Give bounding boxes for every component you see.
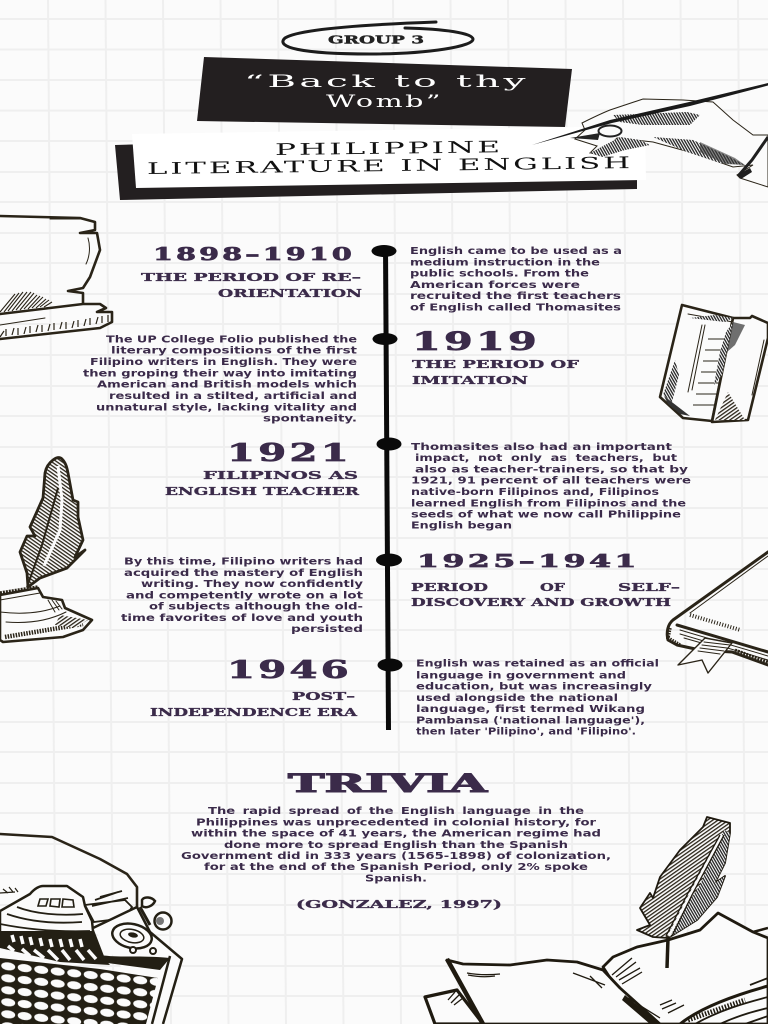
entry 1919 heading: 1919 (412, 327, 540, 356)
entry 1919 text: Filipino writers in English. They were (90, 357, 357, 368)
trivia heading: TRIVIA (288, 769, 488, 798)
icon: hand holding pen (532, 83, 768, 187)
entry 1921 heading: 1921 (227, 438, 352, 467)
subtitle banner (115, 126, 646, 200)
entry 1925–1941 heading: DISCOVERY AND GROWTH (411, 596, 671, 609)
trivia text: for at the end of the Spanish Period, only 2% spoke (204, 862, 588, 873)
entry 1946 heading (150, 655, 358, 719)
icon: quill over open book (425, 817, 768, 1024)
entry 1919 heading (412, 327, 579, 387)
entry 1919 text: literary compositions of the first (111, 346, 358, 356)
icon: scroll (0, 216, 112, 339)
entry 1925–1941 heading: OF (540, 581, 565, 594)
entry 1919 text: then groping their way into imitating (83, 368, 357, 380)
entry 1919 heading: THE PERIOD OF (412, 358, 579, 371)
subtitle banner: PHILIPPINE (275, 137, 503, 159)
group label with hand-drawn ellipse (283, 22, 473, 54)
trivia text: Spanish. (365, 874, 427, 884)
entry 1946 text: language, first termed Wikang (416, 704, 645, 715)
group label with hand-drawn ellipse: GROUP 3 (328, 34, 424, 46)
entry 1898–1910 heading: THE PERIOD OF RE– (141, 271, 361, 284)
entry 1919 text: The UP College Folio published the (106, 334, 357, 346)
entry 1925–1941 heading: SELF– (618, 581, 680, 594)
entry 1946 text: language in government and (416, 670, 626, 682)
icon: two books (660, 305, 768, 422)
trivia text: The rapid spread of the English language in the (208, 806, 584, 817)
entry 1898–1910 heading: ORIENTATION (218, 287, 362, 300)
entry 1898–1910 text: medium instruction in the (410, 258, 600, 268)
entry 1919 text: American and British models which (97, 380, 357, 390)
entry 1921 text: English began (411, 520, 512, 532)
timeline (372, 245, 402, 730)
entry 1925–1941 text: and competently wrote on a lot (126, 590, 364, 602)
entry 1921 text: also as teacher-trainers, so that by (415, 464, 688, 476)
entry 1925–1941 text: writing. They now confidently (141, 579, 363, 590)
entry 1946 text (416, 658, 659, 738)
entry 1919 text: resulted in a stilted, artificial and (109, 391, 357, 402)
entry 1919 heading: IMITATION (412, 374, 528, 387)
trivia text: done more to spread English than the Spanish (224, 840, 568, 851)
subtitle banner: LITERATURE IN ENGLISH (147, 153, 633, 178)
entry 1925–1941 text (121, 556, 364, 635)
entry 1898–1910 text: American forces were (410, 280, 580, 291)
entry 1921 text: native-born Filipinos and, Filipinos (411, 487, 660, 498)
entry 1921 text: Thomasites also had an important (411, 442, 673, 453)
title banner (197, 57, 572, 127)
entry 1921 heading: ENGLISH TEACHER (165, 485, 360, 498)
entry 1946 text: used alongside the national (416, 693, 618, 704)
entry 1898–1910 heading (141, 244, 362, 300)
entry 1921 heading: FILIPINOS AS (203, 469, 358, 482)
entry 1946 heading: INDEPENDENCE ERA (150, 706, 358, 719)
icon: quill and inkwell (0, 458, 92, 642)
entry 1925–1941 heading (411, 552, 680, 609)
entry 1921 text: impact, not only as teachers, but (415, 453, 678, 464)
entry 1925–1941 text: acquired the mastery of English (124, 568, 363, 579)
entry 1925–1941 text: persisted (291, 624, 363, 635)
timeline bar (383, 246, 391, 730)
entry 1898–1910 text (410, 246, 622, 314)
trivia citation: (GONZALEZ, 1997) (296, 898, 502, 911)
quill feather (637, 817, 730, 938)
entry 1919 text: spontaneity. (263, 414, 357, 424)
timeline dots (372, 245, 402, 672)
entry 1946 text: Pambansa ('national language'), (416, 716, 645, 726)
trivia text: Government did in 333 years (1565-1898) of colonization, (181, 851, 611, 862)
entry 1921 text (411, 442, 691, 532)
trivia text: within the space of 41 years, the American regime had (191, 828, 601, 840)
open book (603, 913, 768, 1024)
entry 1946 text: English was retained as an official (416, 658, 659, 670)
entry 1925–1941 text: of subjects although the old- (149, 602, 363, 612)
entry 1898–1910 text: of English called Thomasites (410, 302, 622, 314)
title banner: Womb” (326, 92, 443, 112)
icon: closed book with ribbon (667, 552, 768, 673)
entry 1898–1910 heading: 1898–1910 (153, 244, 355, 265)
entry 1946 heading: 1946 (227, 655, 352, 684)
entry 1898–1910 text: English came to be used as a (410, 246, 622, 257)
entry 1898–1910 text: public schools. From the (410, 268, 589, 280)
entry 1925–1941 heading: 1925–1941 (417, 552, 640, 572)
entry 1925–1941 text: time favorites of love and youth (121, 613, 363, 624)
entry 1921 text: learned English from Filipinos and the (411, 498, 686, 510)
entry 1921 text: 1921, 91 percent of all teachers were (411, 476, 691, 486)
entry 1921 heading (165, 438, 360, 498)
icon: typewriter (0, 834, 182, 1024)
entry 1946 heading: POST– (292, 690, 355, 703)
entry 1919 text: unnatural style, lacking vitality and (96, 402, 357, 414)
entry 1946 text: then later 'Pilipino', and 'Filipino'. (416, 726, 636, 738)
entry 1925–1941 text: By this time, Filipino writers had (124, 556, 363, 568)
entry 1921 text: seeds of what we now call Philippine (411, 510, 681, 520)
trivia text: Philippines was unprecedented in colonial history, for (196, 818, 597, 828)
entry 1919 text (83, 334, 358, 424)
title banner: “Back to thy (244, 72, 529, 92)
entry 1925–1941 heading: PERIOD (411, 581, 489, 594)
entry 1898–1910 text: recruited the first teachers (410, 291, 622, 302)
trivia text (181, 806, 611, 884)
entry 1946 text: education, but was increasingly (416, 682, 652, 692)
